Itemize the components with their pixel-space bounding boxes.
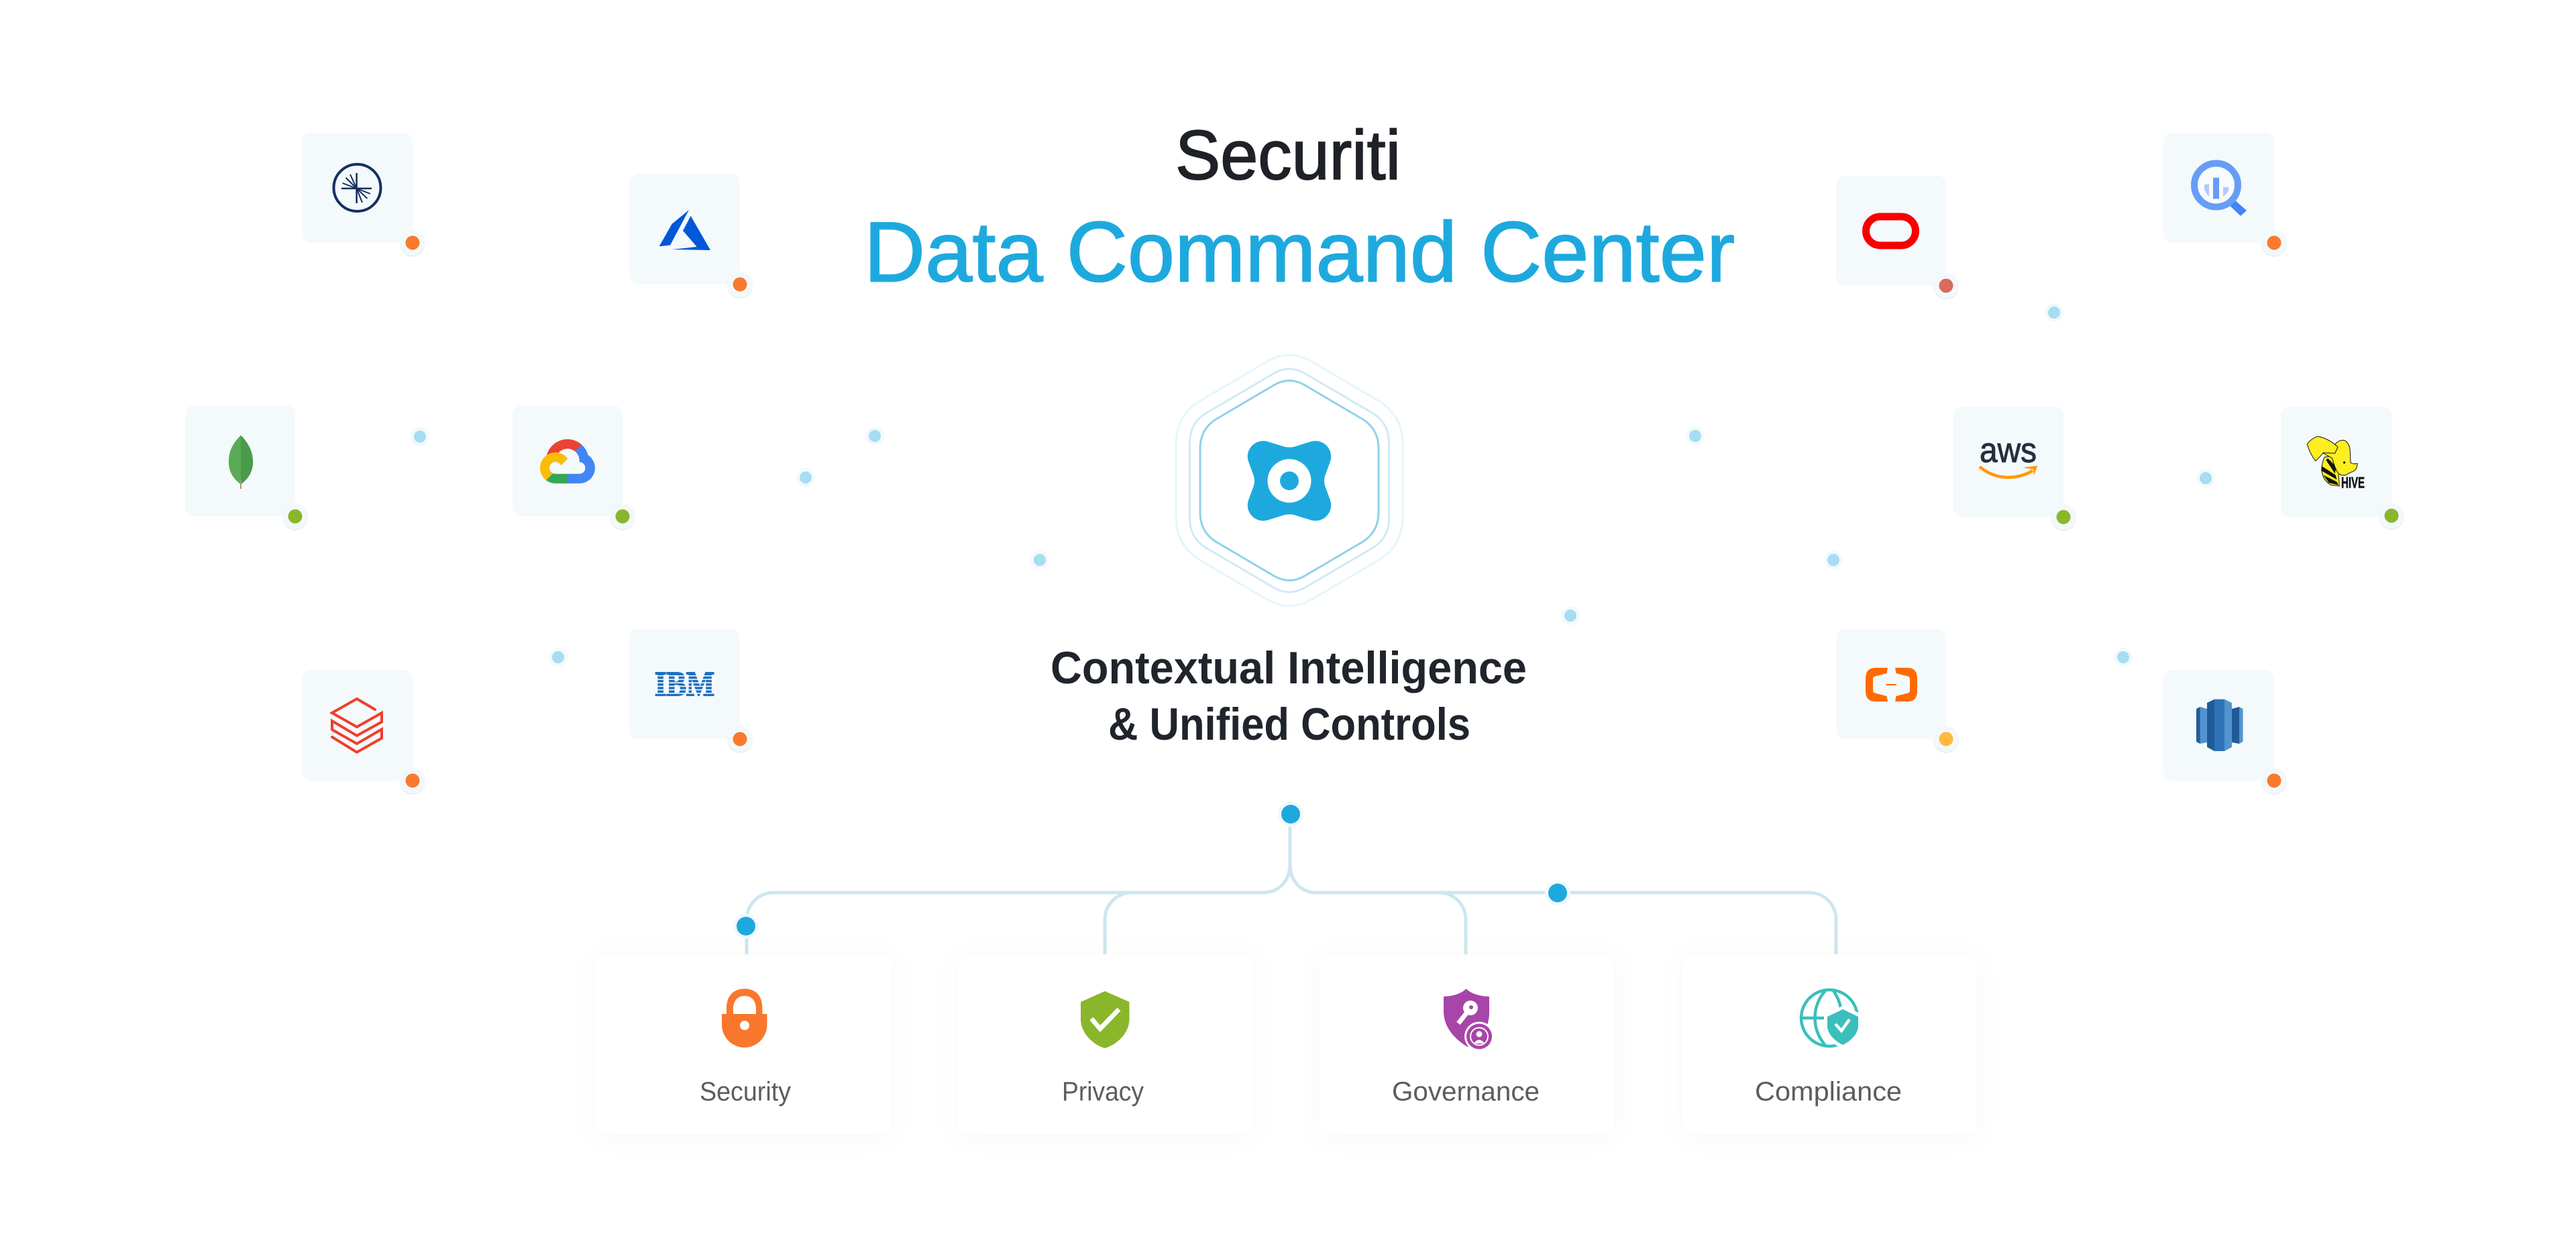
tile: Azure xyxy=(629,174,753,298)
status dot xyxy=(400,768,425,795)
tile: MongoDB xyxy=(185,406,308,530)
icon: Alibaba Cloud logo xyxy=(1866,668,1917,701)
icon: shield check xyxy=(1081,991,1130,1048)
icon: globe with shield xyxy=(1801,990,1862,1049)
node: right connector dot xyxy=(1545,880,1570,905)
label: Compliance: Compliance xyxy=(1755,1077,1902,1107)
tile: Databricks xyxy=(302,670,425,795)
status dot xyxy=(1933,273,1959,300)
icon: Oracle logo xyxy=(1866,217,1916,245)
icon: IBM logo: IBM xyxy=(655,665,714,703)
tile: BigQuery xyxy=(2163,133,2287,257)
panel: Privacy xyxy=(958,954,1252,1134)
title: Data Command Center: Data Command Center xyxy=(864,204,1735,299)
icon: Databricks logo xyxy=(332,699,382,752)
label: Security: Security xyxy=(700,1077,791,1107)
panel: Security xyxy=(596,954,891,1134)
status dot xyxy=(2051,504,2076,531)
title: Securiti: Securiti xyxy=(1175,117,1401,194)
status dot xyxy=(282,504,308,530)
tile: Amazon Redshift xyxy=(2163,670,2287,795)
decorative light-blue nodes xyxy=(411,303,2215,667)
icon: padlock xyxy=(722,989,767,1048)
status dot xyxy=(2379,503,2404,530)
icon: shield with key and person xyxy=(1444,989,1494,1052)
tile: AWS xyxy=(1953,406,2076,531)
tile: Google Cloud xyxy=(513,406,635,530)
status dot xyxy=(610,504,635,530)
icon: Azure logo xyxy=(659,210,710,250)
tile: Confluent xyxy=(302,133,425,257)
node: left connector dot xyxy=(733,913,759,939)
icon: BigQuery logo xyxy=(2194,164,2247,216)
connector tree xyxy=(747,826,1836,954)
icon: Confluent logo xyxy=(334,164,381,211)
icon: Hive logo xyxy=(2307,437,2365,491)
tile: Alibaba Cloud xyxy=(1836,629,1959,753)
heading: Contextual Intelligence & Unified Controls: Contextual Intelligence xyxy=(1051,642,1527,693)
icon: MongoDB leaf xyxy=(229,435,253,489)
status dot xyxy=(2261,230,2287,257)
status dot xyxy=(2261,768,2287,795)
icon: Google Cloud logo xyxy=(540,439,595,484)
icon: AWS logo: aws xyxy=(1980,431,2037,470)
heading: Contextual Intelligence & Unified Controls: & Unified Controls xyxy=(1108,699,1470,750)
panel: Governance xyxy=(1320,954,1615,1134)
icon: Hive logo: HIVE xyxy=(2341,473,2365,491)
icon: Redshift logo xyxy=(2196,699,2243,751)
status dot xyxy=(400,230,425,257)
heading: Contextual Intelligence & Unified Controls xyxy=(1051,642,1527,750)
central hexagon logo xyxy=(1176,355,1403,606)
panel: Compliance xyxy=(1682,954,1977,1134)
status dot xyxy=(727,726,753,753)
node: top connector dot xyxy=(1278,801,1303,827)
label: Governance: Governance xyxy=(1392,1077,1540,1107)
label: Privacy: Privacy xyxy=(1062,1077,1144,1107)
tile: Apache Hive xyxy=(2281,406,2404,530)
status dot xyxy=(1933,726,1959,753)
tile: Oracle xyxy=(1836,176,1959,300)
status dot xyxy=(727,272,753,298)
tile: IBM xyxy=(629,629,753,753)
